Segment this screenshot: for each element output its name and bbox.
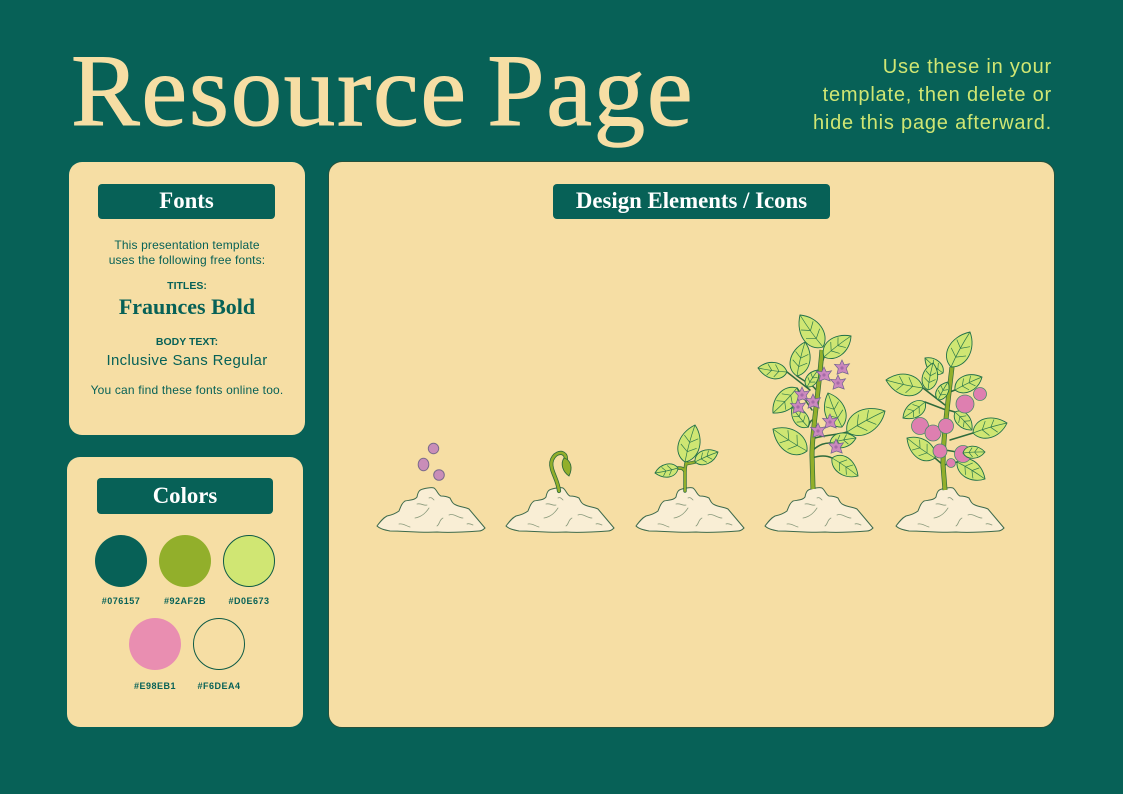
body text label: BODY TEXT: [156,336,218,348]
fonts intro text: uses the following free fonts: [109,252,265,266]
instruction text: Use these in your [883,56,1052,78]
stage 5: fruiting plant and soil [884,326,1010,532]
swatch D0E673 [223,535,275,587]
hex D0E673: #D0E673 [228,596,270,606]
fruits [912,388,986,468]
fonts intro text: This presentation template [114,238,260,252]
fruiting plant stems [923,367,973,490]
title: Resource Page [71,34,694,148]
fonts heading: Fonts [159,188,214,213]
colors heading [97,478,273,514]
flowering plant leaves [757,309,891,483]
titles label: TITLES: [167,280,207,292]
hex F6DEA4: #F6DEA4 [197,681,240,691]
fonts heading [98,184,275,219]
instruction text [813,56,1052,134]
seeds [418,443,444,480]
colors heading: Colors [153,483,217,508]
small leaf over fruit [963,446,985,459]
hex E98EB1: #E98EB1 [134,681,176,691]
design elements heading: Design Elements / Icons [576,188,807,213]
instruction text: template, then delete or [823,84,1052,106]
swatch E98EB1 [129,618,181,670]
swatch 92AF2B [159,535,211,587]
title font name: Fraunces Bold [119,294,255,319]
soil mound [896,488,1004,532]
stage 2: sprout and soil [506,453,614,532]
sprout stem [551,453,566,491]
instruction text: hide this page afterward. [813,112,1052,134]
flowers [790,360,850,453]
fruiting plant leaves [884,326,1010,486]
seedling leaves [654,422,721,480]
hex 076157: #076157 [102,596,140,606]
stage 1: seeds and soil [377,443,485,532]
panel: colors [67,457,303,727]
swatch 076157 [95,535,147,587]
swatch F6DEA4 [193,618,245,670]
seedling stem [678,455,695,491]
design elements heading [553,184,830,219]
hex 92AF2B: #92AF2B [164,596,206,606]
soil mound [765,488,873,532]
soil mound [377,488,485,532]
flowering plant stems [787,350,847,489]
soil mound [506,488,614,532]
stage 3: seedling and soil [636,422,744,532]
stage 4: flowering plant and soil [757,309,891,532]
panel: fonts [69,162,305,435]
fonts intro text [109,238,265,266]
sprout bud [562,458,571,476]
soil mound [636,488,744,532]
body font name: Inclusive Sans Regular [106,352,268,369]
fonts note: You can find these fonts online too. [91,383,283,397]
panel: design elements [328,161,1055,728]
